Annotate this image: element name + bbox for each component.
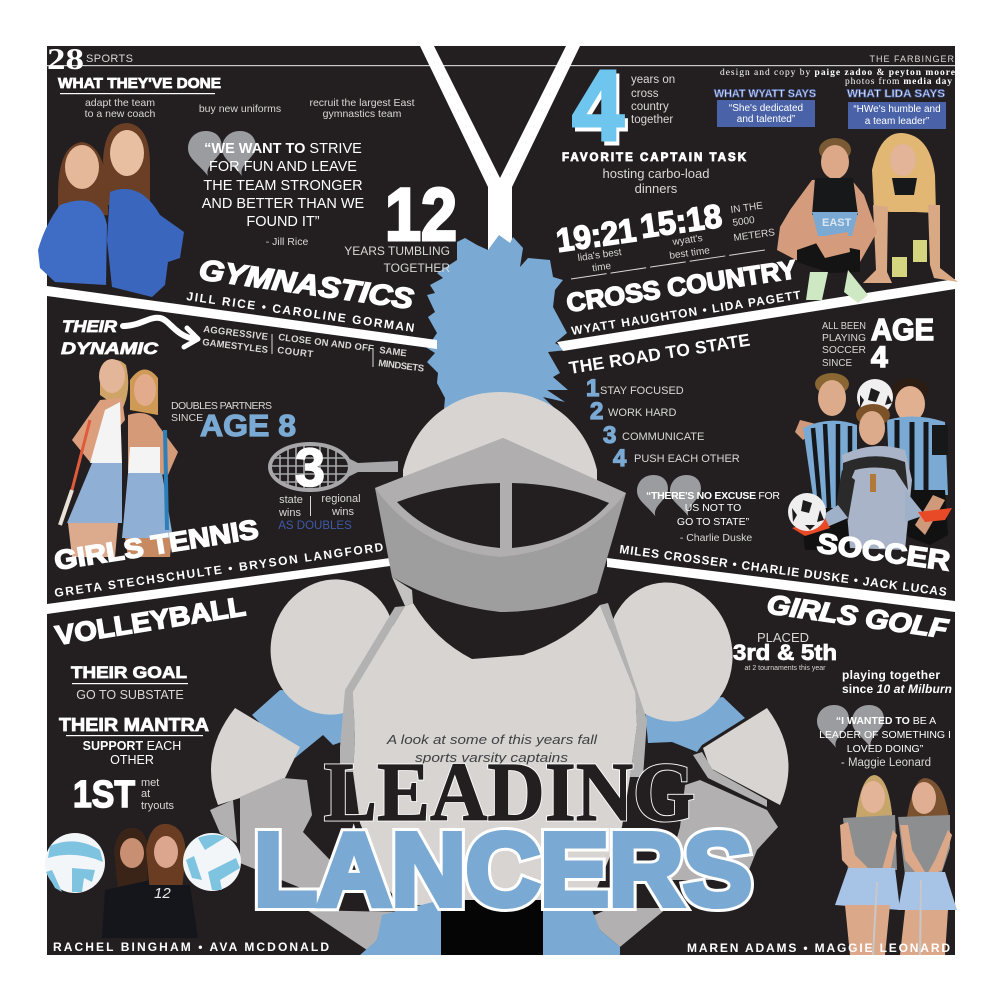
golf quote: - Maggie Leonard	[841, 757, 931, 769]
knight torso	[353, 603, 637, 905]
golf names: MAREN ADAMS • MAGGIE LEONARD	[687, 941, 950, 955]
best times: METERS	[733, 227, 776, 244]
credits: photos from media day	[845, 76, 952, 87]
accomplishments list	[85, 97, 415, 120]
arrow	[123, 318, 198, 347]
gymnastics quote	[202, 141, 365, 248]
road to state list: 3	[603, 422, 616, 449]
volleyball	[45, 833, 105, 893]
doubles wins: wins	[278, 507, 301, 519]
knight legs	[360, 897, 620, 955]
title: leading: LEADING	[324, 746, 695, 839]
age 4 callout: PLAYING	[822, 332, 866, 344]
stat: 12 years tumbling: 12	[385, 173, 457, 256]
favorite captain task: dinners	[635, 181, 678, 196]
doubles wins: state	[279, 494, 303, 506]
runners photo	[777, 133, 958, 303]
volleyball	[183, 833, 241, 891]
favorite captain task: hosting carbo-load	[603, 166, 709, 181]
stat: 4 years: country	[631, 101, 669, 113]
girls tennis heading: GIRLS TENNIS	[52, 514, 260, 576]
soccer players photo	[788, 373, 952, 550]
doubles wins: wins	[331, 506, 354, 518]
intro line: sports varsity captains	[415, 750, 569, 765]
title: lancers: LANCERS	[254, 812, 752, 927]
header bar: THE FARBINGER	[869, 54, 955, 64]
best times: best time	[669, 245, 711, 262]
what wyatt says: “She's dedicated	[729, 103, 803, 114]
their goal	[71, 663, 188, 702]
intro line	[386, 732, 598, 765]
stat: 4 years: together	[631, 114, 673, 126]
stat: 4 years: 4	[572, 50, 624, 162]
player: miles	[795, 373, 857, 550]
gymnastics quote: THE TEAM STRONGER	[203, 178, 363, 194]
favorite captain task: FAVORITE CAPTAIN TASK	[562, 152, 747, 164]
header bar: SPORTS	[86, 53, 133, 65]
what they've done heading: WHAT THEY'VE DONE	[58, 75, 221, 92]
stat: 12 years tumbling	[344, 173, 457, 275]
road to state list: 4	[613, 445, 627, 472]
gymnastics quote: FOUND IT”	[246, 214, 320, 230]
first met stat	[73, 774, 175, 816]
accomplishments list: buy new uniforms	[199, 103, 281, 115]
soccer heading: SOCCER	[815, 527, 952, 577]
knight forearms	[211, 708, 788, 805]
title: lancers: LANCERS	[254, 812, 752, 927]
first met stat: at	[141, 788, 150, 800]
golfer: maren	[835, 775, 900, 955]
soccer quote	[646, 490, 780, 544]
dynamic list: SAME	[379, 345, 407, 359]
volleyball players photo	[45, 824, 241, 938]
best times: wyatt's	[671, 233, 703, 248]
knight visor	[375, 438, 626, 612]
age 4 callout: 4	[871, 341, 888, 374]
what lida says: WHAT LIDA SAYS	[847, 88, 945, 100]
playing together: playing together	[842, 668, 940, 682]
gymnastics names: JILL RICE • CAROLINE GORMAN	[186, 289, 415, 335]
tennis racket icon: 3	[295, 438, 325, 498]
road to state list: 1	[586, 375, 599, 402]
what wyatt says	[714, 88, 816, 127]
their mantra: OTHER	[110, 753, 154, 767]
their dynamic heading: THEIR	[62, 317, 118, 336]
section dividers	[47, 279, 955, 614]
header bar: 28	[47, 41, 84, 76]
intro line: A look at some of this years fall	[386, 732, 598, 747]
soccer quote: US NOT TO	[685, 502, 741, 514]
helmet strap Y shape	[420, 46, 580, 250]
placed stat: PLACED	[757, 630, 809, 645]
doubles wins: AS DOUBLES	[278, 520, 352, 532]
road to state list: PUSH EACH OTHER	[634, 453, 740, 465]
runner: wyatt	[777, 138, 877, 303]
quote marks	[188, 131, 256, 176]
credits: design and copy by paige zadoo & peyton moore	[720, 68, 955, 78]
their mantra: THEIR MANTRA	[59, 715, 209, 735]
placed stat	[733, 630, 837, 672]
panel: girls golf	[687, 589, 957, 955]
age 8 callout: SINCE	[171, 412, 203, 424]
favorite captain task	[562, 152, 747, 196]
panel: gymnastics	[38, 75, 457, 335]
panel: girls tennis	[52, 317, 425, 600]
road to state list: WORK HARD	[608, 407, 676, 419]
panel: soccer	[567, 312, 952, 599]
soccer quote: - Charlie Duske	[680, 532, 752, 544]
girls golf heading: GIRLS GOLF	[765, 589, 951, 645]
placed stat: 3rd & 5th	[733, 640, 837, 665]
cross country names: WYATT HAUGHTON • LIDA PAGETT	[570, 288, 802, 338]
their goal: THEIR GOAL	[71, 663, 187, 682]
age 4 callout: AGE	[871, 312, 934, 347]
road to state list: COMMUNICATE	[622, 431, 704, 443]
doubles wins: regional	[321, 493, 361, 505]
golf quote: “I WANTED TO BE A	[836, 715, 936, 727]
their dynamic heading: DYNAMIC	[61, 339, 159, 358]
volleyball heading: VOLLEYBALL	[53, 591, 248, 651]
best times: IN THE	[730, 200, 764, 216]
golfer: maggie	[873, 778, 957, 955]
what lida says: “HWe's humble and	[853, 104, 941, 115]
road to state list	[586, 375, 740, 472]
player: charlie	[792, 404, 952, 550]
knight arm blue sections	[252, 690, 745, 758]
quote marks	[637, 475, 701, 516]
playing together: since 10 at Milburn	[842, 682, 952, 696]
best times	[554, 197, 776, 279]
title block	[254, 732, 752, 927]
quote marks	[817, 705, 884, 748]
age 8 callout	[171, 400, 296, 443]
their mantra	[59, 715, 209, 767]
gymnastics heading: GYMNASTICS	[197, 254, 416, 316]
player: jack	[887, 378, 948, 545]
road to state list: STAY FOCUSED	[600, 385, 684, 397]
stat: 4 years: years on	[631, 74, 675, 86]
golf quote: LEADER OF SOMETHING I	[819, 729, 951, 741]
best times: 5000	[732, 215, 756, 229]
player: rachel	[102, 828, 150, 938]
panel: volleyball	[45, 591, 329, 954]
player: ava: 12	[154, 885, 171, 902]
age 8 callout: DOUBLES PARTNERS	[171, 400, 272, 412]
soccer ball	[857, 379, 893, 415]
dynamic list: MINDSETS	[378, 358, 425, 375]
what lida says	[847, 88, 946, 129]
road to state heading: THE ROAD TO STATE	[567, 330, 751, 378]
their mantra: SUPPORT EACH	[83, 739, 181, 753]
first met stat: tryouts	[141, 800, 175, 812]
age 8 callout: AGE 8	[200, 408, 296, 443]
first met stat: 1ST	[73, 774, 135, 816]
their dynamic heading	[61, 317, 159, 358]
accomplishments list: gymnastics team	[323, 108, 402, 120]
title: leading: LEADING	[324, 746, 695, 839]
knight gauntlets	[210, 752, 778, 950]
knight plume	[427, 235, 568, 420]
illustration: knight	[210, 392, 788, 955]
dynamic list: GAMESTYLES	[202, 337, 268, 356]
playing together	[842, 668, 952, 696]
gymnastics quote: “WE WANT TO STRIVE	[204, 141, 362, 157]
knight pauldrons	[256, 565, 748, 736]
best times: 15:18	[638, 197, 724, 245]
doubles wins	[278, 493, 361, 532]
age 4 callout: ALL BEEN	[822, 320, 866, 332]
tennis racket icon	[270, 438, 398, 498]
age 4 callout: SINCE	[822, 357, 852, 369]
stat: 12 years tumbling: TOGETHER	[384, 261, 450, 275]
gymnastics quote: FOR FUN AND LEAVE	[209, 159, 357, 175]
soccer ball	[788, 493, 826, 531]
stat: 12 years tumbling: YEARS TUMBLING	[344, 244, 450, 258]
golf quote	[819, 715, 951, 769]
what wyatt says: WHAT WYATT SAYS	[714, 88, 816, 100]
soccer quote: GO TO STATE”	[677, 516, 750, 528]
best times: time	[592, 261, 612, 274]
golf quote: LOVED DOING”	[847, 743, 924, 755]
accomplishments list: adapt the team	[85, 97, 155, 109]
knight visor eye slits	[397, 483, 609, 548]
credits	[720, 68, 955, 87]
header bar	[47, 41, 955, 76]
player: ava	[146, 824, 198, 938]
panel: cross country	[554, 50, 958, 338]
best times: lida's best	[577, 247, 622, 264]
age 4 callout: SOCCER	[822, 344, 866, 356]
placed stat: at 2 tournaments this year	[745, 665, 826, 672]
cross country heading: CROSS COUNTRY	[564, 254, 798, 318]
player: greta	[60, 359, 128, 557]
dynamic list: AGGRESSIVE	[203, 324, 268, 343]
age 4 callout	[822, 312, 934, 374]
volleyball names: RACHEL BINGHAM • AVA MCDONALD	[53, 940, 329, 954]
gymnastics quote: AND BETTER THAN WE	[202, 196, 365, 212]
knight torso edge strips	[340, 603, 647, 777]
what lida says: a team leader”	[865, 116, 929, 127]
accomplishments list: recruit the largest East	[309, 97, 415, 109]
gymnasts photo	[38, 123, 184, 297]
their goal: GO TO SUBSTATE	[76, 688, 184, 702]
dynamic list	[202, 324, 425, 375]
soccer quote: “THERE'S NO EXCUSE FOR	[646, 490, 780, 502]
gymnastics quote: - Jill Rice	[266, 236, 308, 248]
stat: 4 years: 4	[575, 54, 627, 166]
player: bryson	[122, 369, 178, 557]
knight collar flap	[392, 577, 413, 606]
best times: 19:21	[554, 211, 638, 259]
golfers photo	[835, 775, 957, 955]
what wyatt says: and talented”	[737, 114, 795, 125]
dynamic list: CLOSE ON AND OFF	[278, 332, 374, 355]
runner: wyatt: EAST	[822, 217, 852, 229]
girls tennis names: GRETA STECHSCHULTE • BRYSON LANGFORD	[53, 540, 385, 600]
stat: 4 years	[572, 50, 675, 166]
road to state list: 2	[590, 398, 603, 425]
knight helmet dome	[403, 392, 597, 540]
soccer names: MILES CROSSER • CHARLIE DUSKE • JACK LUCAS	[619, 542, 948, 599]
tennis players photo	[60, 359, 178, 557]
first met stat: met	[141, 777, 159, 789]
dynamic list: COURT	[277, 345, 314, 360]
accomplishments list: to a new coach	[85, 108, 155, 120]
knight visor upper plate	[375, 438, 626, 557]
runner: lida	[863, 133, 958, 283]
stat: 4 years: cross	[631, 88, 659, 100]
